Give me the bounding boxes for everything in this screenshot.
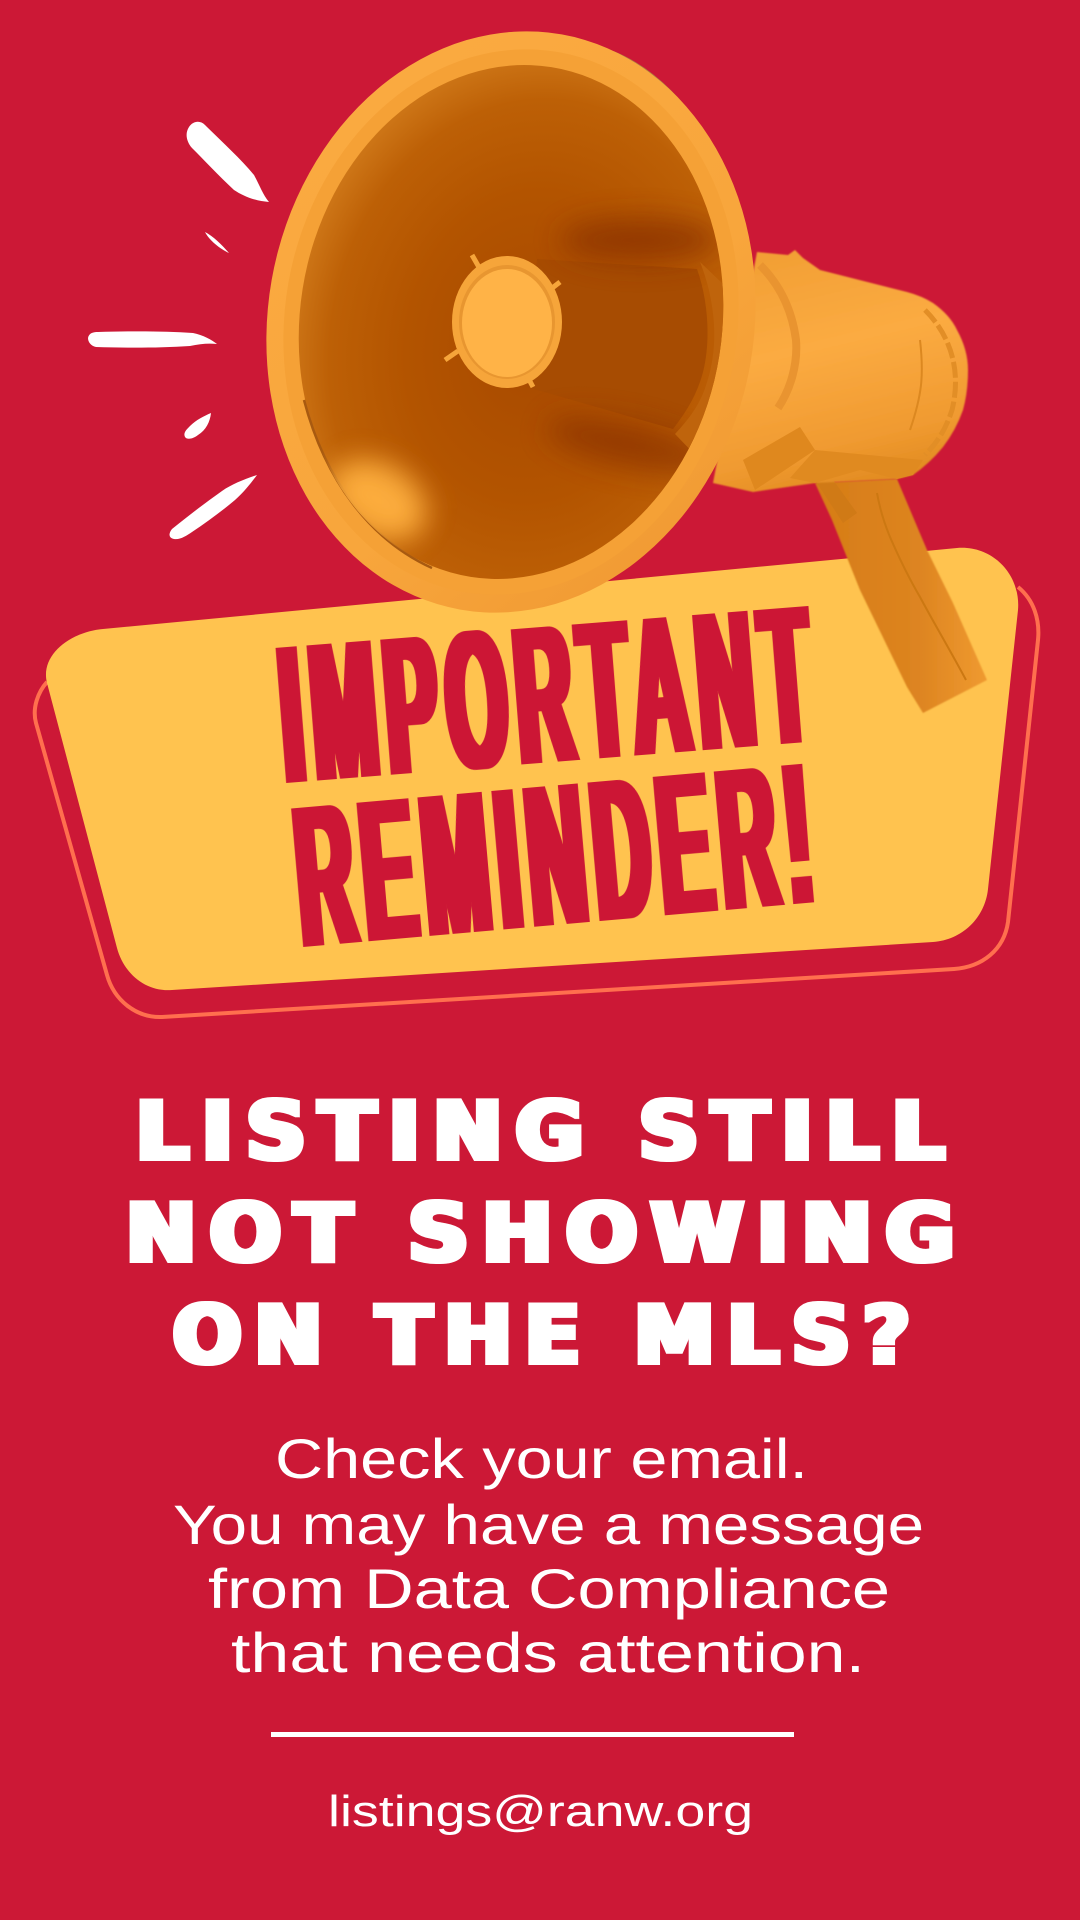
megaphone rim shade: [241, 13, 781, 631]
horn inner tube: [594, 266, 708, 429]
horn lower-left crescent: [304, 400, 432, 568]
banner: outline: [35, 587, 1038, 1017]
megaphone outer rim: [221, 0, 801, 652]
megaphone handle: [815, 473, 987, 713]
headline line 2: NOT SHOWING: [126, 1187, 968, 1280]
megaphone body: [713, 250, 968, 492]
megaphone body details: [743, 265, 956, 490]
speaker disc: [445, 255, 562, 388]
banner: yellow plate: [46, 548, 1018, 990]
body line 3: from Data Compliance: [208, 1557, 890, 1620]
body line 1: Check your email.: [275, 1427, 808, 1490]
rim back band: [613, 53, 713, 150]
headline line 1: LISTING STILL: [136, 1085, 958, 1178]
horn shading and highlights: [315, 218, 740, 557]
banner title: [272, 563, 830, 990]
icon: sound burst lines: [88, 122, 269, 539]
contact email: listings@ranw.org: [328, 1787, 753, 1836]
divider: [271, 1732, 794, 1737]
body line 2: You may have a message: [173, 1493, 924, 1556]
icon: megaphone: [221, 0, 987, 713]
body line 4: that needs attention.: [231, 1621, 865, 1684]
headline line 3: ON THE MLS?: [173, 1289, 923, 1382]
megaphone horn interior: [262, 34, 760, 610]
body text: [173, 1427, 924, 1684]
headline: [126, 1085, 968, 1382]
